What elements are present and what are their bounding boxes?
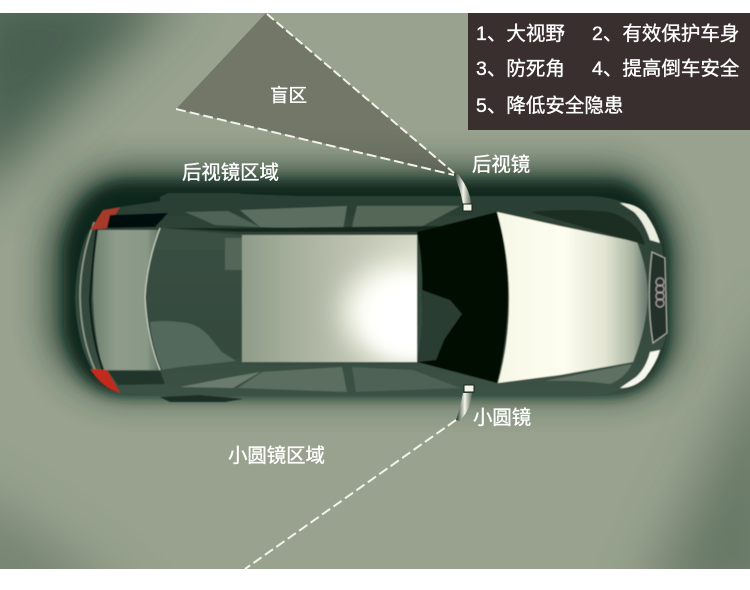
panel: features [468, 13, 750, 130]
car [75, 193, 667, 402]
front corner chrome top [620, 203, 660, 243]
feature 2: 2、有效保护车身 [592, 23, 739, 45]
blind zone wedge [176, 13, 454, 174]
rear pillar highlight [225, 238, 242, 270]
rear window reflection [150, 321, 236, 370]
outer tail lip [80, 222, 96, 372]
rear trunk [93, 230, 160, 370]
rear dark seam [90, 228, 103, 370]
side window bottom front [352, 367, 460, 392]
label: small round mirror zone: 小圆镜区域 [228, 445, 325, 467]
hood shadow upper [530, 210, 645, 245]
feature 1: 1、大视野 [476, 23, 565, 45]
label: blind zone: 盲区 [270, 85, 307, 106]
feature 3: 3、防死角 [476, 58, 565, 80]
roof [241, 234, 418, 363]
rear window highlight [145, 228, 160, 370]
side window bottom rear [180, 372, 260, 388]
hood [497, 212, 648, 383]
dashed sight line upper [267, 14, 454, 173]
rear band top [107, 213, 168, 228]
rear window [145, 228, 242, 370]
side window bottom middle [238, 367, 347, 392]
feature 4: 4、提高倒车安全 [592, 58, 740, 80]
car shadow [48, 168, 680, 396]
audi rings [656, 278, 664, 307]
tail light top [90, 207, 120, 230]
car body [75, 193, 667, 399]
spoiler bottom [160, 395, 243, 402]
windshield [417, 212, 508, 383]
side window top front [351, 206, 460, 231]
lower dashed line [245, 420, 456, 569]
top side mirror [454, 172, 472, 211]
windshield reflection [417, 290, 462, 362]
label: rear mirror: 后视镜 [472, 154, 530, 176]
side window top rear [185, 211, 260, 227]
label: small round mirror: 小圆镜 [473, 407, 531, 429]
bottom side mirror [456, 385, 474, 421]
feature 5: 5、降低安全隐患 [476, 95, 623, 117]
grille [649, 252, 667, 343]
spoiler top [160, 193, 243, 200]
side window top middle [240, 206, 347, 230]
rear band bottom [108, 371, 165, 385]
tail light bottom [90, 369, 120, 393]
dark belt top [165, 226, 440, 232]
fender reflection [545, 364, 632, 384]
label: rear mirror zone: 后视镜区域 [182, 162, 279, 184]
dashed sight line lower [176, 109, 454, 175]
front corner chrome bottom [620, 350, 660, 388]
